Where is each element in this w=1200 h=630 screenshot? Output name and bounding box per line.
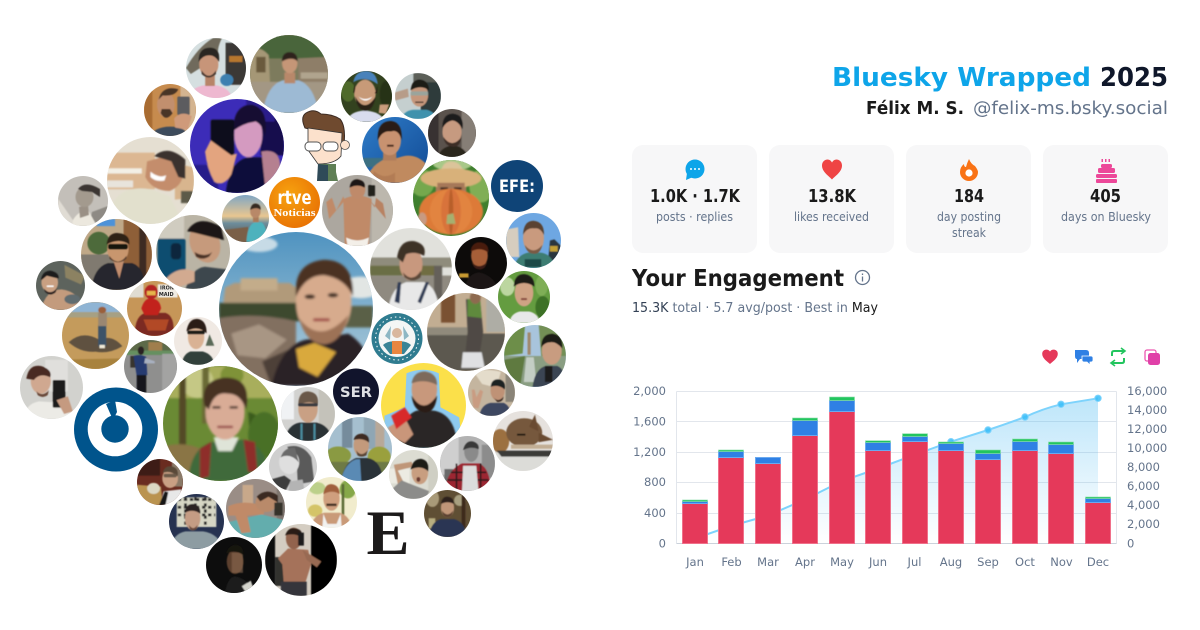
right y axis labels: 16,000	[1127, 384, 1167, 398]
logo: RTVE Noticias: Noticias	[274, 208, 316, 219]
icon: flame	[960, 159, 978, 181]
stat value: 184	[954, 187, 984, 207]
avatar: young man with glasses	[174, 317, 222, 365]
avatar: man in white tank outdoors	[306, 477, 357, 528]
stat label second line: streak	[952, 225, 987, 240]
panel: day posting streak	[906, 145, 1031, 253]
avatar: man with teal shirt in city	[506, 213, 561, 268]
avatar: surprised man with arm raised	[389, 450, 438, 499]
avatar: man at Amsterdam canal	[504, 325, 566, 387]
area: cumulative engagement	[695, 398, 1098, 544]
logo: blue ring mark	[74, 388, 158, 472]
icon: info	[856, 270, 870, 284]
avatar: mirror selfie on wood	[144, 84, 196, 136]
user name and handle: Félix M. S.	[866, 99, 964, 119]
avatar: bearded man on yellow background	[381, 363, 466, 448]
chart: engagement by month	[633, 384, 1167, 569]
left y axis labels: 1,200	[633, 445, 666, 459]
title: 2025	[1100, 63, 1168, 93]
logo: SER	[333, 368, 379, 414]
panel: days on Bluesky	[1043, 145, 1168, 253]
x axis month labels: Feb	[721, 555, 742, 569]
avatar: man with raglan sweater, city	[328, 417, 392, 481]
avatar: man with blue shirt in park	[250, 35, 328, 113]
right y axis labels: 2,000	[1127, 517, 1160, 531]
x axis month labels: May	[830, 555, 854, 569]
x axis month labels: Jun	[868, 555, 887, 569]
panel: likes received	[769, 145, 894, 253]
avatar: muscular mirror selfie	[322, 175, 393, 246]
avatar: man with sunglasses on street	[81, 219, 152, 290]
avatar: man with green sweater in forest	[163, 366, 278, 481]
x axis month labels: Jan	[685, 555, 704, 569]
icon: reposts	[1111, 348, 1125, 366]
left y axis labels: 0	[659, 536, 666, 550]
avatar: man on patterned pillow	[169, 494, 224, 549]
avatar: man at city overlook	[370, 228, 452, 310]
heading: your engagement: Your Engagement	[631, 266, 844, 292]
icon: chat bubble	[686, 160, 704, 180]
right y axis labels	[1127, 384, 1167, 550]
avatar: person in plaza with navy jacket	[124, 340, 177, 393]
right y axis labels: 0	[1127, 536, 1134, 550]
engagement summary: 15.3K total · 5.7 avg/post · Best in May	[632, 300, 878, 316]
right y axis labels: 14,000	[1127, 403, 1167, 417]
avatar: cartoon man with glasses	[303, 111, 350, 181]
avatar: man in shadow	[206, 537, 262, 593]
avatar: man in navy shirt among trees	[424, 490, 471, 537]
logo: RTVE Noticias	[269, 177, 320, 228]
avatar: main profile at Acropolis	[219, 232, 373, 386]
user name and handle: @felix-ms.bsky.social	[973, 99, 1168, 119]
stat label: days on Bluesky	[1061, 209, 1152, 224]
logo: SER: SER	[340, 385, 372, 401]
legend	[1042, 348, 1160, 366]
stat value: 1.0K · 1.7K	[650, 187, 741, 207]
stat value: 13.8K	[808, 187, 857, 207]
x axis month labels: Sep	[977, 555, 999, 569]
avatar: man shirtless with tattoo	[36, 261, 85, 310]
avatar: cat on shelf	[493, 411, 553, 471]
x axis month labels: Mar	[757, 555, 779, 569]
x axis month labels: Nov	[1050, 555, 1073, 569]
avatar: man with pink shirt	[186, 38, 246, 98]
left y axis labels	[633, 384, 666, 550]
avatar: man with pumpkin and straw hat	[413, 160, 489, 236]
avatar: sunset coast	[222, 195, 269, 242]
avatar: man with blue phone	[156, 215, 230, 289]
x axis month labels: Apr	[795, 555, 815, 569]
bars: red likes	[682, 412, 1110, 544]
avatar: man on black background	[455, 237, 507, 289]
avatar: greyscale woman	[269, 443, 317, 491]
right y axis labels: 8,000	[1127, 460, 1160, 474]
user name and handle	[866, 99, 1168, 119]
avatar: man with beard, dark room	[428, 109, 476, 157]
line markers	[948, 395, 1101, 445]
logo: EFE	[491, 160, 543, 212]
logo: RTVE Noticias: rtve	[278, 187, 312, 209]
left y axis labels: 2,000	[633, 384, 666, 398]
avatar: person in dry field	[62, 302, 129, 369]
icon: cake	[1096, 159, 1117, 183]
left y axis labels: 1,600	[633, 414, 666, 428]
avatar: man with blue cap	[341, 71, 392, 122]
panel: posts and replies	[632, 145, 757, 253]
icon: quotes	[1145, 350, 1160, 365]
avatar cluster	[20, 35, 566, 596]
avatar: man with glasses at table	[137, 459, 183, 505]
axis line	[676, 542, 1116, 544]
icon: likes	[1042, 350, 1058, 364]
avatar: mirror selfie with white shirt	[20, 356, 83, 419]
right y axis labels: 12,000	[1127, 422, 1167, 436]
right y axis labels: 4,000	[1127, 498, 1160, 512]
avatar: greyscale man with red plaid shirt	[440, 436, 495, 491]
avatar: man with glasses and lanyard	[281, 387, 335, 441]
bars: green reposts	[682, 397, 1110, 502]
avatar: Iron Man figure: MAID	[159, 292, 174, 298]
right y axis labels: 10,000	[1127, 441, 1167, 455]
logo: EFE: EFE:	[499, 177, 535, 197]
logo: El Espanol E	[352, 497, 424, 569]
avatar: Iron Man figure: IRON	[160, 285, 174, 291]
stat value: 405	[1090, 187, 1121, 207]
stat label: likes received	[794, 209, 869, 224]
x axis month labels: Aug	[940, 555, 962, 569]
avatar: shirtless man blue sky	[362, 117, 428, 183]
logo: El Espanol E: E	[366, 497, 410, 568]
stat label: posts · replies	[656, 209, 733, 224]
avatar: person on street	[427, 293, 505, 371]
line: cumulative engagement	[695, 398, 1098, 538]
x axis month labels: Jul	[907, 555, 921, 569]
avatar: man lying on teal	[226, 479, 285, 538]
icon: replies	[1075, 350, 1093, 365]
avatar: purple-lit selfie	[190, 99, 284, 193]
avatar: man outdoors with green foliage	[498, 271, 550, 323]
avatar: shirtless mirror selfie dark	[265, 524, 337, 596]
avatar: Iron Man figure	[127, 281, 182, 336]
bars: blue replies	[682, 400, 1110, 504]
x axis month labels	[685, 555, 1109, 569]
left y axis labels: 400	[644, 506, 666, 520]
avatar: smiling man on terrace	[107, 137, 194, 224]
stat label: day posting	[937, 209, 1001, 224]
avatar: man with clear glasses in car	[395, 73, 441, 119]
x axis month labels: Dec	[1087, 555, 1109, 569]
x axis month labels: Oct	[1015, 555, 1035, 569]
avatar: man with peace sign	[468, 369, 515, 416]
right y axis labels: 6,000	[1127, 479, 1160, 493]
title: Bluesky Wrapped	[832, 63, 1091, 93]
icon: heart	[822, 160, 842, 180]
avatar: greyscale looking up	[58, 176, 108, 226]
logo: round badge	[372, 313, 422, 364]
y grid	[676, 392, 1116, 544]
left y axis labels: 800	[644, 475, 666, 489]
